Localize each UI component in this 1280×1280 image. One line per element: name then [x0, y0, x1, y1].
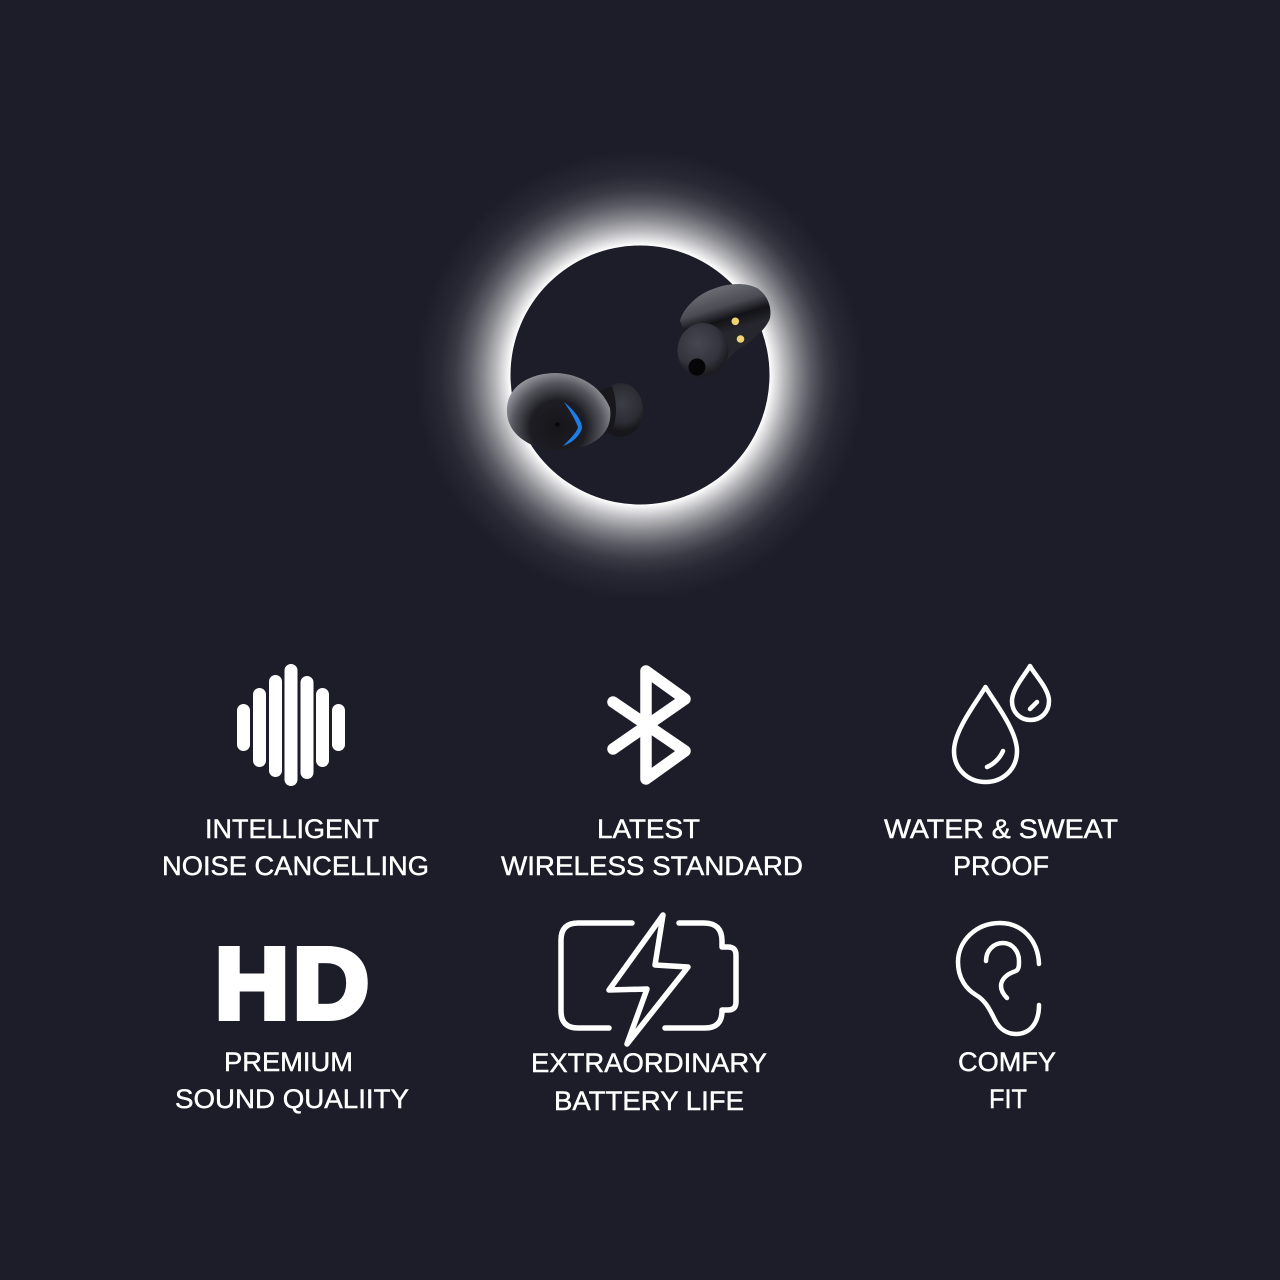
ear tip: [598, 383, 643, 437]
label: extraordinary battery life: BATTERY LIFE: [554, 1086, 744, 1116]
label: comfy fit: COMFY: [958, 1047, 1056, 1077]
icon: water drops: [954, 666, 1049, 782]
icon: HD: [215, 928, 369, 1040]
label: intelligent noise cancelling: NOISE CANCELLING: [162, 851, 429, 881]
blue LED crescent: [563, 402, 582, 446]
icon: HD: D: [293, 928, 369, 1040]
label: premium sound quality: PREMIUM: [224, 1047, 353, 1077]
icon: sound wave: [237, 664, 345, 786]
label: latest wireless standard: LATEST: [597, 814, 700, 844]
icon: bluetooth: [613, 671, 685, 779]
body shell: [507, 373, 610, 451]
label: comfy fit: [958, 1047, 1056, 1114]
label: latest wireless standard: [501, 814, 803, 881]
icon: HD: H: [215, 928, 289, 1040]
hero: glowing eclipse ring: [415, 150, 865, 600]
label: comfy fit: FIT: [989, 1084, 1027, 1114]
neck: [596, 386, 616, 436]
label: water and sweat proof: [884, 814, 1118, 881]
label: water and sweat proof: PROOF: [953, 851, 1049, 881]
label: premium sound quality: SOUND QUALIITY: [175, 1084, 409, 1114]
label: latest wireless standard: WIRELESS STANDARD: [501, 851, 803, 881]
label: premium sound quality: [175, 1047, 409, 1114]
icon: ear: [958, 923, 1039, 1034]
label: intelligent noise cancelling: [162, 814, 429, 881]
earbud: upper right: [678, 284, 770, 378]
label: extraordinary battery life: [531, 1048, 767, 1116]
earbud: lower left: [507, 373, 643, 451]
label: intelligent noise cancelling: INTELLIGENT: [205, 814, 379, 844]
label: extraordinary battery life: EXTRAORDINARY: [531, 1048, 767, 1078]
ear tip: [678, 323, 728, 378]
body shell: [680, 284, 770, 361]
icon: battery with lightning bolt: [561, 915, 736, 1044]
label: water and sweat proof: WATER & SWEAT: [884, 814, 1118, 844]
gold charging contacts: [732, 318, 739, 325]
